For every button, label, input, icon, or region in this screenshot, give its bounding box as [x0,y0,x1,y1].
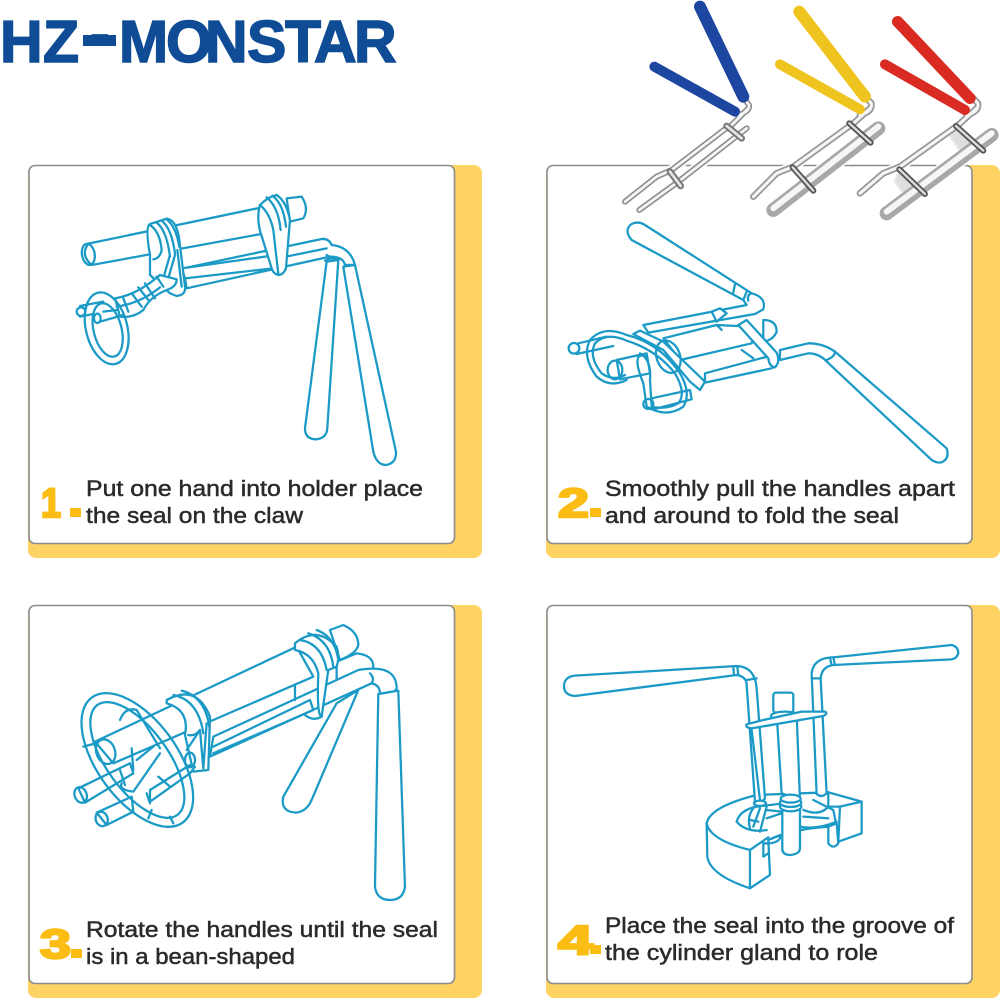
number 2 [558,480,601,526]
step 1 text [86,476,423,528]
logo: HZ-MONSTAR: HZ-MONSTAR [0,1,397,75]
step 2 text [605,476,956,528]
step 3 text: is in a bean-shaped [86,944,295,969]
step 1 text: Put one hand into holder place [86,476,423,501]
product photo: three tool sizes [625,7,992,213]
number 2: 2 [558,480,589,526]
illustration: seal in cylinder gland [564,645,958,888]
step 2 text: and around to fold the seal [605,503,899,528]
number 1 [41,480,81,526]
step 3 text: Rotate the handles until the seal [86,917,438,942]
step 2 text: Smoothly pull the handles apart [605,476,956,501]
number 3: 3 [40,921,71,967]
panel: step 2 [546,165,1000,558]
panel: step 1 [28,165,482,558]
tool: yellow [753,12,878,210]
step 1 text: the seal on the claw [86,503,304,528]
tool: red [860,22,992,213]
illustration: seal on claw [77,195,396,465]
step 4 text: the cylinder gland to role [605,940,878,965]
step 3 text [86,917,438,969]
number 3 [40,921,82,967]
number 1: 1 [41,480,61,526]
illustration: rotating handles [60,625,405,900]
panel: step 4 [546,605,1000,998]
illustration: pulling handles apart [569,223,948,463]
number 4: 4 [558,917,593,963]
step 4 text: Place the seal into the groove of [605,913,955,938]
tool: blue [625,7,749,210]
step 4 text [605,913,955,965]
panel: step 3 [28,605,482,998]
number 4 [558,917,601,963]
